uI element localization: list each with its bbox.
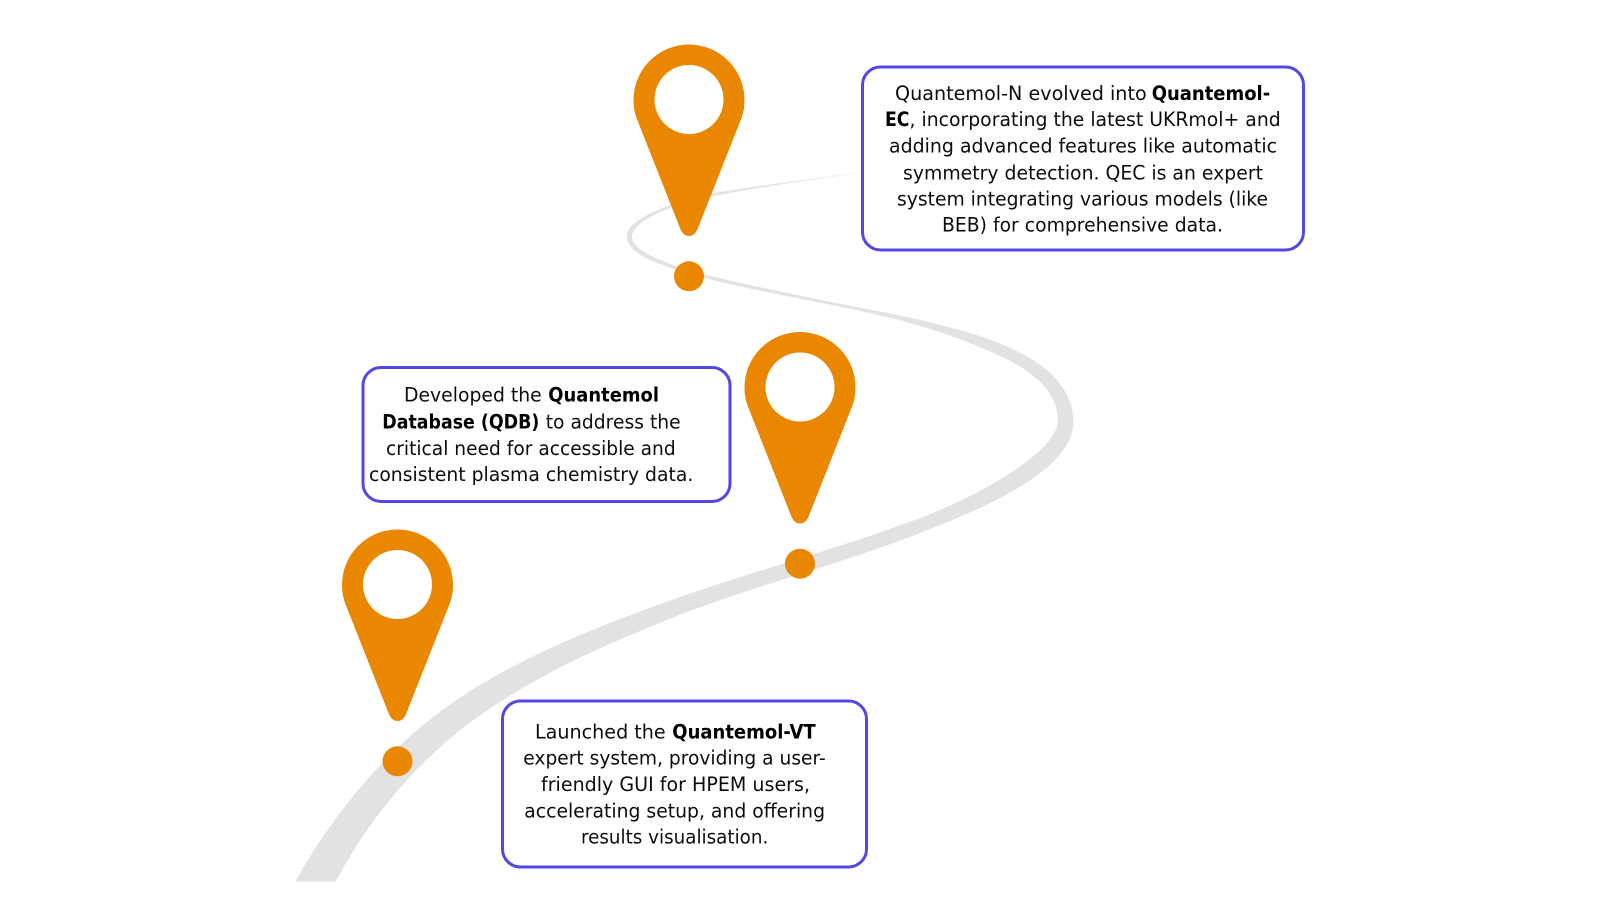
road marker dot 2 xyxy=(785,549,815,579)
icon: middle map pin xyxy=(744,332,856,524)
text block: Quantemol-EC description: Quantemol- xyxy=(1152,82,1270,105)
text block: Quantemol-VT description: Launched the xyxy=(535,720,666,743)
text block: Quantemol-VT description: accelerating setup, and offering xyxy=(524,800,825,823)
milestone 2: middle pin and road marker xyxy=(744,332,856,579)
text block: Quantemol-EC description: Quantemol-N evolved into xyxy=(895,82,1147,105)
text block: QDB description xyxy=(369,384,693,486)
text block: QDB description: Quantemol xyxy=(548,384,659,407)
panel: Quantemol Database callout xyxy=(363,368,730,502)
panel: Quantemol-EC callout xyxy=(862,67,1304,250)
text block: Quantemol-VT description: results visualisation. xyxy=(581,826,768,849)
text block: QDB description: Developed the xyxy=(404,384,542,407)
icon: lower map pin xyxy=(342,530,453,721)
text block: Quantemol-EC description: EC xyxy=(885,108,910,131)
text block: Quantemol-VT description xyxy=(523,720,826,849)
text block: Quantemol-EC description xyxy=(885,82,1281,237)
text block: Quantemol-EC description: system integrating various models (like xyxy=(897,187,1268,210)
text block: QDB description: critical need for accessible and xyxy=(386,437,676,460)
road marker dot 1 xyxy=(674,261,704,291)
winding road, tapering with distance xyxy=(295,172,1073,882)
text block: Quantemol-VT description: expert system, providing a user- xyxy=(523,746,826,769)
text block: Quantemol-VT description: friendly GUI for HPEM users, xyxy=(541,773,810,796)
road marker dot 3 xyxy=(382,746,412,776)
text block: QDB description: Database (QDB) xyxy=(382,410,539,433)
text block: Quantemol-EC description: , incorporating the latest UKRmol+ and xyxy=(910,108,1281,131)
text block: Quantemol-VT description: Quantemol-VT xyxy=(672,720,816,743)
text block: QDB description: consistent plasma chemistry data. xyxy=(369,463,693,486)
milestone 3: lower pin and road marker xyxy=(342,530,453,776)
text block: QDB description: to address the xyxy=(546,410,681,433)
text block: Quantemol-EC description: symmetry detection. QEC is an expert xyxy=(903,161,1263,184)
text block: Quantemol-EC description: adding advanced features like automatic xyxy=(889,135,1277,158)
panel: Quantemol-VT callout xyxy=(502,701,866,867)
milestone 1: top pin and road marker xyxy=(634,44,744,291)
icon: top map pin xyxy=(634,44,744,236)
text block: Quantemol-EC description: BEB) for comprehensive data. xyxy=(942,214,1223,237)
